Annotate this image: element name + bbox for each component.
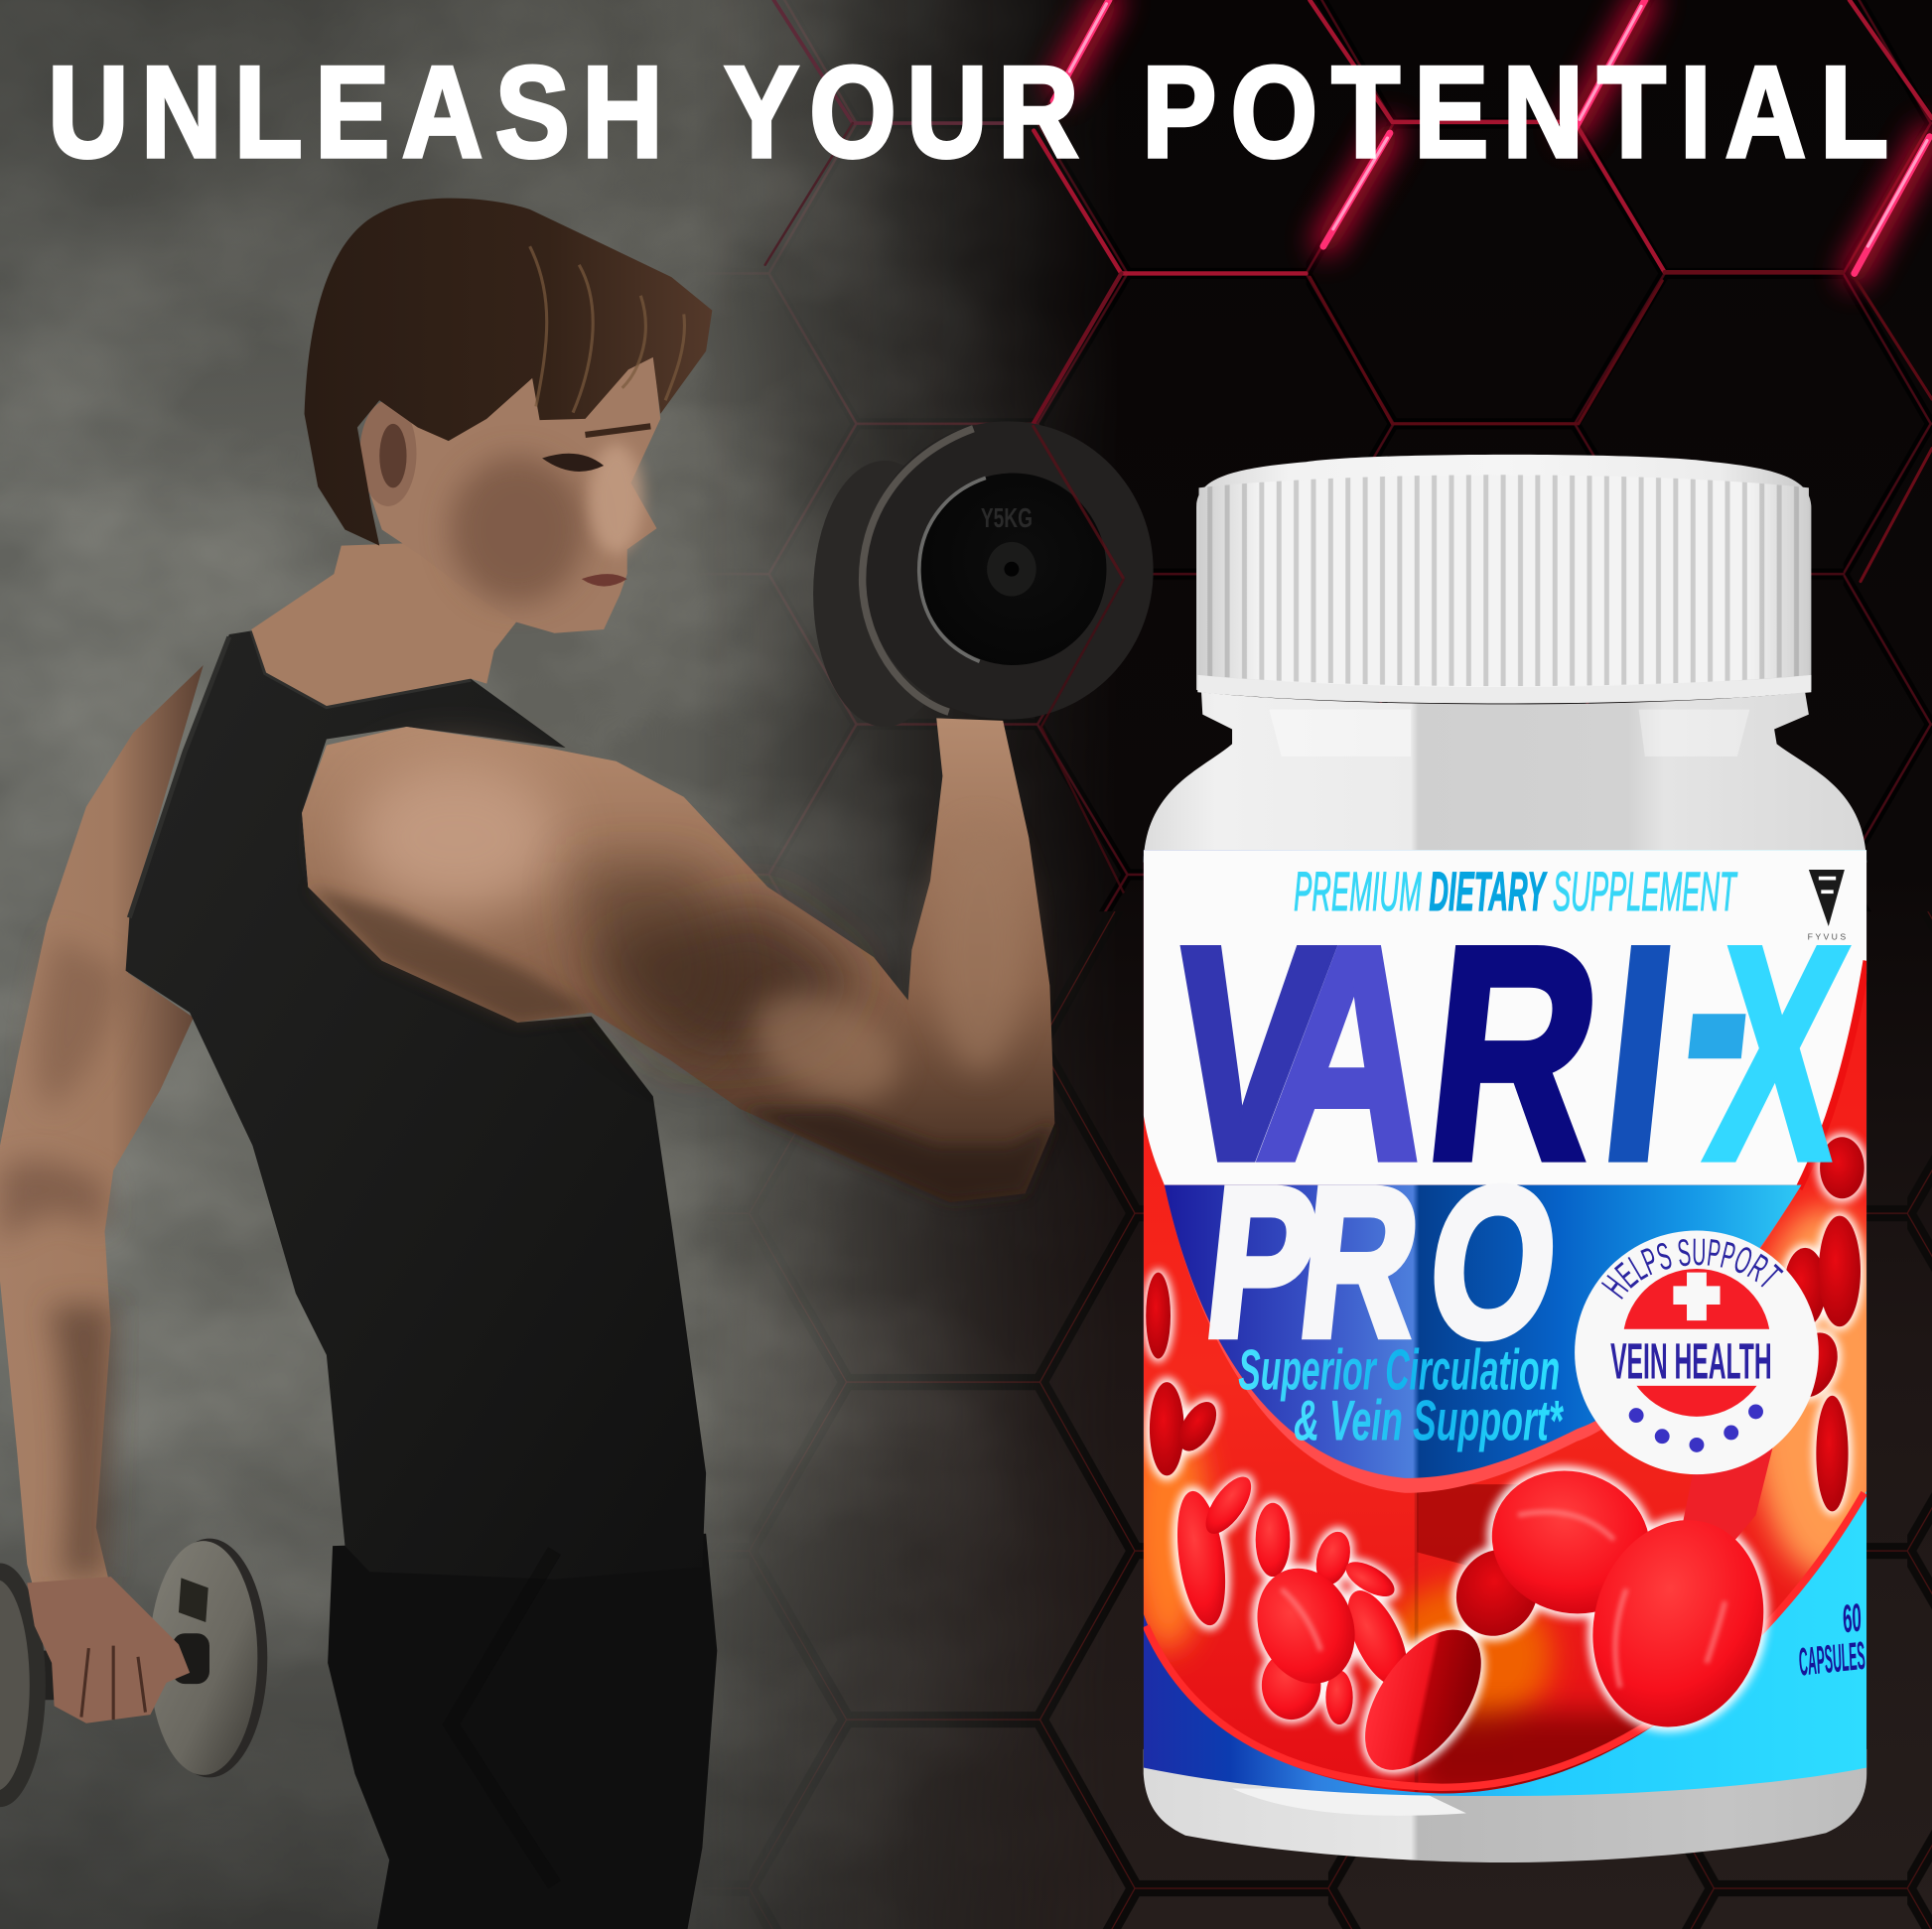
fyvus logo	[1808, 870, 1846, 942]
hexagon wall pattern	[665, 0, 1932, 1929]
product name vari-x: VARI	[1154, 885, 1689, 1223]
lower dumbbell	[0, 1539, 267, 1807]
blue swoop panel	[1165, 1185, 1801, 1493]
faint hex lines over dumbbell and shorts	[451, 425, 1124, 1884]
title: unleash your potential: YOUR	[725, 40, 1078, 184]
red swoosh field	[1129, 863, 1897, 1798]
fyvus logo: FYVUS	[1808, 932, 1846, 942]
capsule count: 60	[1841, 1596, 1863, 1641]
neck	[251, 542, 516, 706]
shorts	[328, 1534, 717, 1929]
product name pro: PRO	[1196, 1145, 1568, 1381]
face	[359, 351, 660, 633]
red blood cells	[1142, 1133, 1867, 1796]
upper dumbbell: Y5KG	[981, 502, 1033, 533]
product bottle	[1144, 455, 1867, 1862]
product name vari-x: -X	[1666, 842, 1863, 1223]
title: unleash your potential: POTENTIAL	[1142, 40, 1888, 184]
tagline	[1238, 1339, 1564, 1452]
man lifting dumbbells	[0, 199, 1154, 1929]
label	[1129, 838, 1897, 1798]
product name vari-x	[1154, 842, 1863, 1223]
upper dumbbell	[813, 421, 1154, 727]
cell glow	[1142, 1133, 1867, 1796]
rear arm	[0, 665, 204, 1601]
bottle base	[1144, 1749, 1866, 1862]
neon hexagon lines	[765, 0, 1932, 582]
premium dietary supplement line: PREMIUM DIETARY SUPPLEMENT	[1294, 860, 1738, 922]
vein health badge: HELPS SUPPORT	[1600, 1239, 1783, 1300]
tagline: & Vein Support*	[1294, 1389, 1564, 1452]
cell bodies	[1684, 1447, 1773, 1540]
tagline: Superior Circulation	[1238, 1339, 1560, 1403]
bottle neck and shoulder	[1144, 692, 1866, 863]
white upper label	[1144, 838, 1866, 1185]
tank top	[126, 630, 706, 1580]
title: unleash your potential: UNLEASH	[48, 40, 662, 184]
capsule count	[1793, 1596, 1867, 1685]
upper raised arm	[302, 718, 1054, 1202]
bottle cap	[1196, 455, 1811, 703]
hair	[305, 199, 712, 546]
vein health badge	[1575, 1231, 1819, 1475]
title: unleash your potential	[48, 40, 1888, 184]
hand gripping the dumbbell	[27, 1577, 190, 1723]
